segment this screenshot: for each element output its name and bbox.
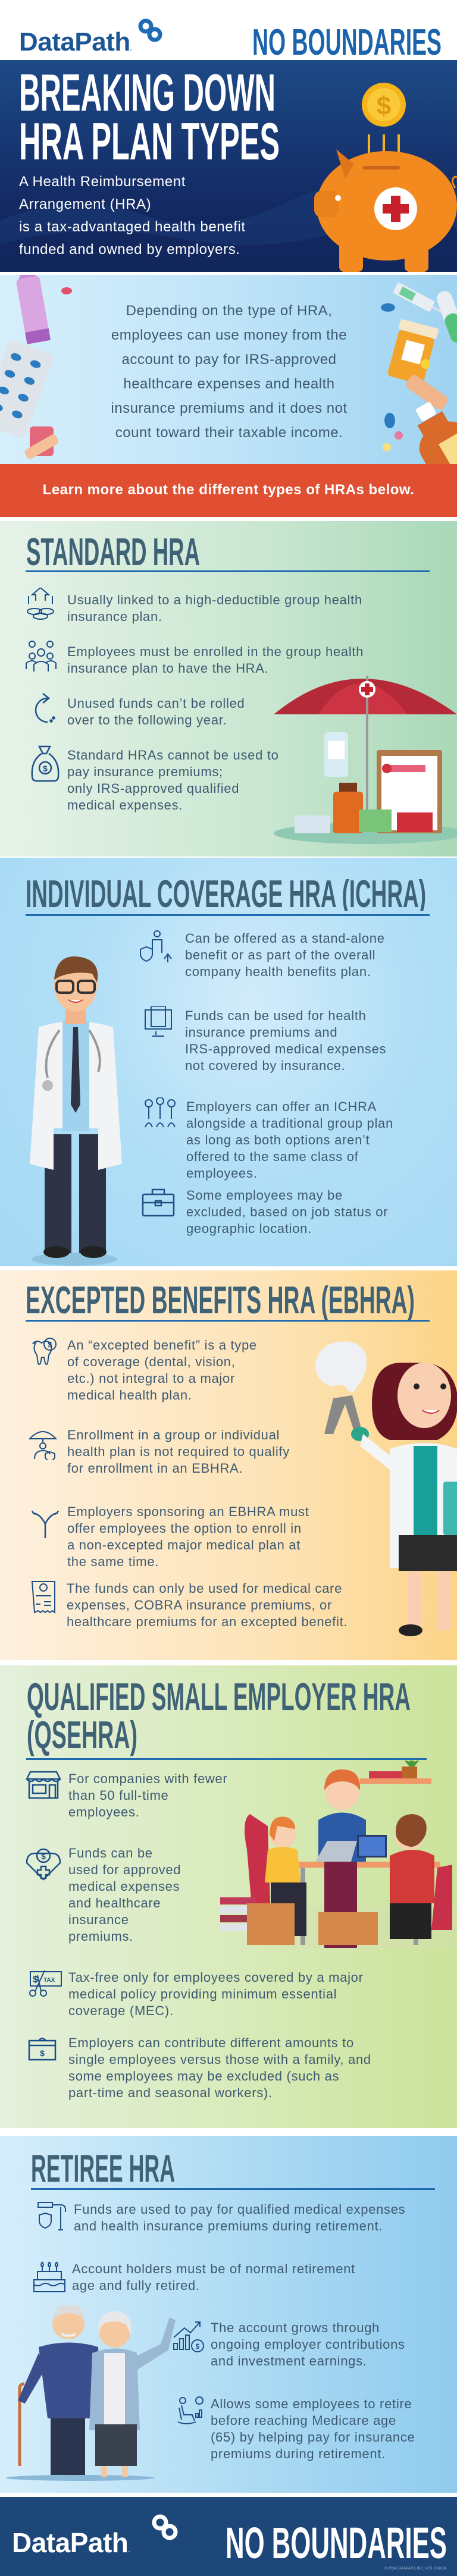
heading: Standard HRA: STANDARD HRA [26, 530, 200, 573]
icon: person shield dollar [140, 930, 172, 962]
red banner: Learn more about the different types of HRAs below. [43, 482, 414, 498]
bullet: funds for premiums: IRS-approved medical expenses [185, 1041, 386, 1056]
bullet: account grows: The account grows through [211, 2320, 380, 2335]
panel: EBHRA [0, 1270, 457, 1660]
bullet: different amounts: some employees may be excluded (such as [68, 2069, 339, 2084]
panel: QSEHRA [0, 1665, 457, 2128]
footer logo: DataPath [12, 2514, 190, 2558]
intro panel [0, 275, 457, 464]
icon: money bag [31, 746, 60, 782]
bullet: funds approved expenses [26, 1845, 216, 1949]
bullet: funds approved expenses: Funds can be [68, 1846, 153, 1860]
icon: diamond coin cross: $ [41, 1852, 46, 1861]
bullet: excluded by job status: Some employees may be [186, 1188, 343, 1203]
bullet: linked to HDHP [27, 588, 362, 624]
bullet: stand-alone: company health benefits plan. [185, 964, 371, 979]
panel: Retiree HRA [0, 2136, 457, 2493]
icon: growth chart [173, 2320, 206, 2353]
icon: growth chart: $ [196, 2342, 200, 2351]
bullet: fewer than 50: For companies with fewer [68, 1771, 227, 1786]
bullet: funds for premiums: insurance premiums and [185, 1025, 337, 1040]
bullet: unused funds: Unused funds can’t be rolled [67, 696, 245, 711]
panel: standard HRA [0, 521, 457, 856]
footer logo: DataPath: DataPath. [12, 2527, 130, 2558]
bullet: account grows: ongoing employer contributions [211, 2337, 405, 2352]
icon: tax scissors: $ [33, 1975, 38, 1985]
intro text [19, 174, 246, 258]
bullet: funds use: expenses, COBRA insurance premiums, or [67, 1598, 332, 1612]
intro text: Arrangement (HRA) [19, 196, 151, 212]
intro body text: account to pay for IRS-approved [121, 352, 337, 368]
icon: cash envelope: $ [40, 2048, 45, 2058]
intro text: is a tax-advantaged health benefit [19, 219, 246, 235]
bullet: normal retirement age: Account holders must be of normal retirement [72, 2261, 355, 2276]
bullet: stand-alone: Can be offered as a stand-alone [185, 931, 385, 946]
bullet: funds for premiums: Funds can be used for health [185, 1008, 367, 1023]
bullet: qualified expenses in retirement: Funds are used to pay for qualified medical expenses [74, 2202, 405, 2217]
icon: storefront [26, 1771, 61, 1800]
bullet: unused funds [35, 693, 245, 727]
icon: coins up [27, 588, 54, 620]
icon: receipt [31, 1581, 55, 1614]
icon: group of people [26, 641, 57, 672]
bullet: linked to HDHP: Usually linked to a high-deductible group health [67, 592, 362, 607]
icon: tax scissors: TAX [43, 1977, 55, 1984]
icon: birthday cake [33, 2261, 66, 2294]
bullet: different amounts [26, 2035, 430, 2106]
bullet: excepted benefit definition: medical health plan. [67, 1388, 192, 1402]
bullet: different amounts: part-time and seasonal workers). [68, 2085, 273, 2100]
logo: DataPath: DataPath. [19, 27, 132, 57]
icon: cash envelope [28, 2036, 58, 2062]
footer [0, 2497, 457, 2576]
bullet: stand-alone: benefit or as part of the overall [185, 947, 375, 962]
bullet: funds use: The funds can only be used for medical care [67, 1581, 342, 1596]
bullet: funds for premiums: not covered by insurance. [185, 1058, 345, 1073]
heading: Retiree HRA: RETIREE HRA [31, 2147, 175, 2189]
intro body text: insurance premiums and it does not [111, 400, 348, 416]
bullet: excluded by job status: excluded, based on job status or [186, 1204, 388, 1219]
intro body text [111, 303, 348, 441]
bullet: tax-free MEC: coverage (MEC). [68, 2003, 174, 2018]
bullet: excepted benefit definition: etc.) not integral to a major [67, 1371, 235, 1386]
bullet: funds approved expenses: used for approved [68, 1862, 181, 1877]
bullet: tax-free MEC [26, 1969, 418, 2023]
bullet: fewer than 50 [26, 1771, 227, 1819]
bullet: employers must offer option: the same time. [67, 1554, 159, 1569]
bullet: cannot pay premiums: Standard HRAs cannot be used to [67, 748, 279, 763]
illustration: dentist woman with tooth [315, 1341, 457, 1636]
bullet: unused funds: over to the following year. [67, 713, 227, 727]
bullet: funds use: healthcare premiums for an excepted benefit. [67, 1614, 348, 1629]
bullet: tax-free MEC: medical policy providing minimum essential [68, 1987, 337, 2001]
bullet: funds for premiums [145, 1006, 386, 1073]
logo: DataPath [19, 19, 162, 57]
bullet: account grows [173, 2320, 452, 2373]
header bar [0, 0, 457, 62]
bullet: alongside group plan: offered to the same class of [186, 1149, 358, 1164]
bullet: account grows: and investment earnings. [211, 2354, 367, 2368]
bullet: funds approved expenses: insurance [68, 1912, 129, 1927]
bullet: stand-alone [140, 930, 385, 979]
icon: tax scissors [28, 1969, 64, 1999]
illustration: umbrella with medical items [274, 676, 457, 844]
icon: rollover arrow [35, 693, 55, 723]
bullet: qualified expenses in retirement: and health insurance premiums during retirement. [74, 2219, 383, 2233]
icon: tooth dollar [32, 1338, 57, 1365]
bullet: enrollment not required [29, 1427, 290, 1476]
heading: QSEHRA: (QSEHRA) [27, 1713, 137, 1756]
bullet: funds use [31, 1581, 348, 1629]
bullet: fewer than 50: employees. [68, 1805, 140, 1819]
icon: faucet shield [37, 2201, 68, 2231]
bullet: cannot pay premiums: pay insurance premiums; [67, 764, 223, 779]
copyright: © 2024 DATAPATH, INC. VER. 061824 [384, 2567, 446, 2571]
icon: computer bill [145, 1006, 172, 1037]
bullet: alongside group plan [145, 1097, 393, 1181]
bullet: retire before Medicare: before reaching Medicare age [211, 2413, 396, 2428]
icon: briefcase [142, 1188, 175, 1217]
bullet: excepted benefit definition [32, 1338, 257, 1402]
bullet: alongside group plan: as long as both options aren’t [186, 1132, 370, 1147]
bullet: different amounts: Employers can contribute different amounts to [68, 2035, 354, 2050]
bullet: cannot pay premiums: medical expenses. [67, 798, 183, 812]
bullet: alongside group plan: employees. [186, 1166, 258, 1181]
bullet: cannot pay premiums [31, 746, 279, 812]
icon: split arrow [31, 1511, 60, 1538]
red banner [0, 464, 457, 517]
intro body text: count toward their taxable income. [115, 425, 343, 441]
icon: voting hands [145, 1097, 176, 1128]
illustration: medicine right [381, 283, 457, 464]
bullet: must be enrolled: insurance plan to have the HRA. [67, 661, 268, 676]
icon: tooth dollar: $ [48, 1340, 52, 1349]
icon: rocking chair [176, 2396, 205, 2426]
bullet: funds approved expenses: medical expenses [68, 1879, 180, 1894]
bullet: normal retirement age [33, 2261, 414, 2296]
bullet: funds approved expenses: premiums. [68, 1929, 133, 1944]
icon: diamond coin cross [26, 1845, 61, 1881]
bullet: employers must offer option [31, 1504, 309, 1569]
bullet: retire before Medicare [176, 2396, 452, 2467]
intro body text: Depending on the type of HRA, [126, 303, 332, 319]
intro text: funded and owned by employers. [19, 241, 240, 258]
bullet: excluded by job status: geographic location. [186, 1221, 312, 1236]
bullet: excepted benefit definition: An “excepted benefit” is a type [67, 1338, 257, 1353]
illustration: medicine left [0, 275, 72, 459]
bullet: alongside group plan: Employers can offer an ICHRA [186, 1099, 377, 1114]
bullet: employers must offer option: a non-excepted major medical plan at [67, 1538, 301, 1552]
bullet: employers must offer option: Employers sponsoring an EBHRA must [67, 1504, 309, 1519]
bullet: excluded by job status [142, 1188, 388, 1236]
icon: umbrella person [29, 1431, 57, 1460]
main title [19, 63, 280, 167]
bullet: funds approved expenses: and healthcare [68, 1896, 161, 1910]
hero panel [0, 60, 457, 272]
bullet: linked to HDHP: insurance plan. [67, 609, 162, 624]
bullet: must be enrolled: Employees must be enrolled in the group health [67, 644, 364, 659]
heading: QSEHRA [27, 1675, 411, 1756]
bullet: fewer than 50: than 50 full-time [68, 1788, 168, 1803]
illustration: male doctor [30, 956, 122, 1266]
bullet: retire before Medicare: Allows some employees to retire [211, 2396, 412, 2411]
intro body text: healthcare expenses and health [123, 376, 335, 392]
icon: money bag: $ [43, 764, 48, 773]
bullet: tax-free MEC: Tax-free only for employees covered by a major [68, 1970, 364, 1985]
bullet: retire before Medicare: (65) by helping pay for insurance [211, 2430, 415, 2445]
bullet: enrollment not required: for enrollment in an EBHRA. [67, 1461, 243, 1476]
bullet: retire before Medicare: premiums during retirement. [211, 2446, 386, 2461]
bullet: enrollment not required: health plan is not required to qualify [67, 1444, 290, 1459]
intro body text: employees can use money from the [111, 327, 347, 343]
illustration: elderly couple [3, 2305, 176, 2484]
bullet: qualified expenses in retirement [37, 2201, 453, 2237]
bullet: excepted benefit definition: of coverage (dental, vision, [67, 1354, 236, 1369]
bullet: cannot pay premiums: only IRS-approved qualified [67, 781, 239, 796]
illustration: piggy bank with coin: $ [377, 92, 391, 121]
intro text: A Health Reimbursement [19, 174, 186, 190]
bullet: enrollment not required: Enrollment in a group or individual [67, 1427, 280, 1442]
bullet: alongside group plan: alongside a traditional group plan [186, 1116, 393, 1131]
illustration: office team at desk [211, 1761, 457, 1954]
illustration: piggy bank with coin [314, 83, 457, 272]
panel: ICHRA [0, 858, 457, 1266]
bullet: employers must offer option: offer employees the option to enroll in [67, 1521, 302, 1536]
bullet: must be enrolled [26, 641, 364, 676]
bullet: different amounts: single employees versus those with a family, and [68, 2052, 371, 2067]
bullet: normal retirement age: age and fully retired. [72, 2278, 200, 2293]
